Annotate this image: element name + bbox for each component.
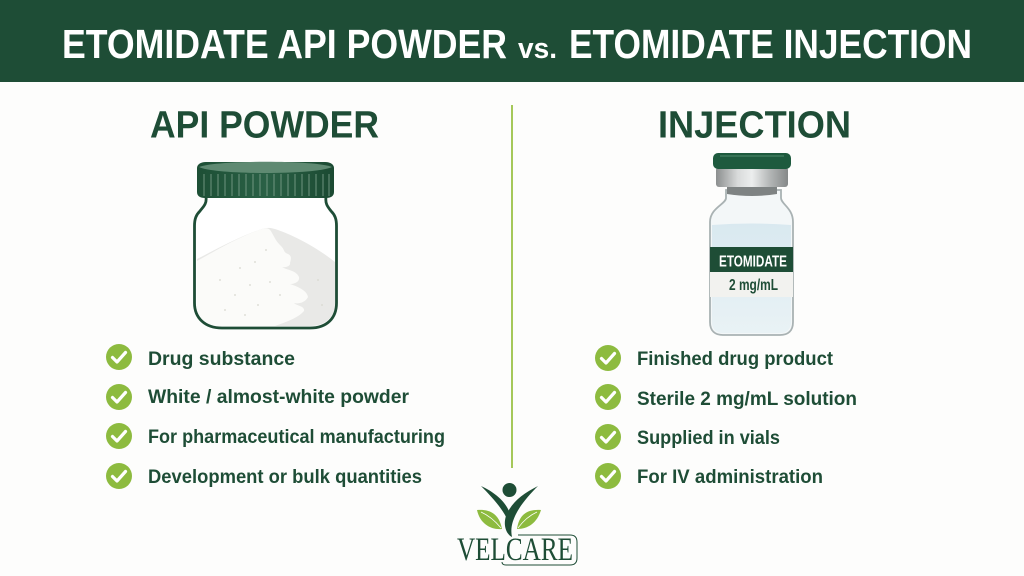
- item: bulk quantities: Development or bulk quantities: [148, 467, 422, 488]
- header banner: [0, 0, 1024, 82]
- item: sterile solution: Sterile 2 mg/mL solution: [637, 389, 857, 410]
- vial label: [710, 247, 793, 297]
- item: supplied in vials: Supplied in vials: [637, 428, 780, 449]
- vial label: 2 mg/mL: [729, 277, 778, 294]
- heading: API powder: API POWDER: [150, 104, 379, 146]
- item: finished drug product: [595, 345, 834, 371]
- item: bulk quantities: [106, 463, 422, 489]
- item: pharmaceutical manufacturing: [106, 423, 445, 449]
- title: ETOMIDATE API POWDER: [62, 21, 507, 67]
- title: [62, 21, 972, 67]
- wordmark frame: [502, 535, 577, 565]
- wordmark: VELCARE: [457, 532, 573, 568]
- checklist: injection: [595, 345, 857, 489]
- item: pharmaceutical manufacturing: For pharmaceutical manufacturing: [148, 427, 445, 448]
- title: ETOMIDATE INJECTION: [569, 21, 972, 67]
- item: supplied in vials: [595, 424, 780, 450]
- item: IV administration: For IV administration: [637, 467, 823, 488]
- panel: API powder: [106, 104, 445, 489]
- icon: figure and leaves: [477, 483, 541, 537]
- vial label: ETOMIDATE: [719, 254, 787, 270]
- panel: injection: [595, 104, 857, 489]
- item: sterile solution: [595, 384, 857, 410]
- item: white powder: White / almost-white powder: [148, 387, 410, 408]
- checklist: API powder: [106, 344, 445, 489]
- item: finished drug product: Finished drug product: [637, 349, 834, 370]
- item: drug substance: [106, 344, 295, 370]
- item: drug substance: Drug substance: [148, 349, 295, 370]
- icon: vial: [710, 153, 793, 335]
- icon: powder jar: [194, 162, 336, 328]
- item: IV administration: [595, 463, 823, 489]
- center divider: [511, 105, 513, 468]
- item: white powder: [106, 384, 410, 410]
- title: vs.: [518, 33, 557, 65]
- heading: injection: INJECTION: [658, 104, 851, 146]
- logo: Velcare: [457, 483, 577, 568]
